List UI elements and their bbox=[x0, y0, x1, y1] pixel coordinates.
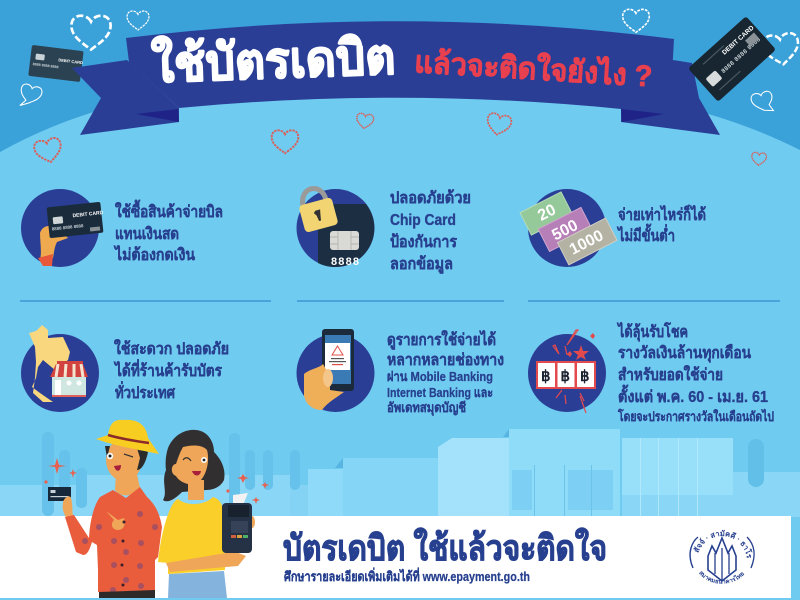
man: held card bbox=[48, 487, 71, 501]
man: shirt bbox=[65, 487, 162, 594]
item 4 text bbox=[113, 339, 229, 402]
item 4: Thailand map and shop icon bbox=[21, 325, 99, 412]
item 2: padlock and chip icon bbox=[296, 189, 374, 268]
item 4 text: ได้ที่ร้านค้ารับบัตร bbox=[113, 359, 222, 380]
item 1 text: ใช้ซื้อสินค้าจ่ายบิล bbox=[115, 199, 223, 221]
item 5 text: ผ่าน Mobile Banking bbox=[387, 369, 493, 384]
man: trousers bbox=[99, 590, 155, 598]
bank association emblem: สมาคมธนาคารไทย bbox=[699, 571, 744, 584]
item 1 text: แทนเงินสด bbox=[115, 225, 179, 243]
title: red part: แล้วจะติดใจยังไง ? bbox=[414, 44, 653, 94]
item 1: card in hand icon: 8888 8888 8888 bbox=[52, 223, 84, 231]
item 6: slot machine icon: ฿ bbox=[541, 368, 551, 385]
item 1 text bbox=[113, 199, 223, 264]
item 3: banknotes icon: 500 bbox=[549, 217, 581, 244]
man: hat bbox=[96, 420, 159, 454]
item 4 text: ใช้สะดวก ปลอดภัย bbox=[114, 339, 229, 358]
red dashed hearts bbox=[33, 112, 767, 166]
woman: jeans bbox=[168, 571, 227, 598]
item 6 text: สำหรับยอดใช้จ่าย bbox=[618, 365, 723, 384]
man: hair bbox=[105, 446, 148, 470]
item 6 text bbox=[616, 321, 774, 424]
woman: yellow shirt bbox=[158, 497, 225, 574]
item 5 text: อัพเดทสมุดบัญชี bbox=[387, 400, 466, 416]
right debit card: 8888 8888 8888 bbox=[721, 37, 762, 75]
item 5: phone in hand icon bbox=[296, 329, 374, 412]
title ribbon bbox=[72, 21, 720, 135]
item 5 text bbox=[387, 330, 504, 416]
man with hat holding card bbox=[48, 420, 162, 598]
left debit card bbox=[28, 45, 84, 82]
item 3: banknotes icon: 1000 bbox=[567, 227, 606, 259]
item 2 text: ป้องกันการ bbox=[390, 233, 457, 251]
man: neck bbox=[115, 470, 140, 495]
title: white part: ใช้บัตรเดบิต bbox=[150, 28, 396, 93]
item 3 text bbox=[616, 203, 706, 245]
man: head bbox=[106, 439, 142, 481]
item 2 text: ปลอดภัยด้วย bbox=[390, 189, 471, 207]
man: eye and mouth bbox=[107, 453, 113, 459]
item 2 text: Chip Card bbox=[390, 212, 456, 229]
item 6 text: ได้ลุ้นรับโชค bbox=[616, 321, 688, 342]
right debit card bbox=[688, 16, 776, 102]
woman: neck bbox=[188, 480, 204, 500]
item 3 text: จ่ายเท่าไหร่ก็ได้ bbox=[618, 203, 706, 224]
footer white strip bbox=[0, 516, 791, 598]
item 2: padlock and chip icon: 8888 bbox=[331, 256, 359, 268]
right debit card: DEBIT CARD bbox=[721, 24, 756, 57]
woman: card terminal bbox=[222, 503, 252, 553]
item 5 text: ดูรายการใช้จ่ายได้ bbox=[387, 330, 496, 351]
item 5 text: Internet Banking และ bbox=[387, 385, 493, 400]
item 1 text: ไม่ต้องกดเงิน bbox=[113, 245, 195, 264]
bank association emblem bbox=[689, 530, 755, 584]
white dashed hearts bbox=[17, 9, 800, 115]
item 3: banknotes icon: 20 bbox=[535, 201, 559, 225]
woman: receipt paper bbox=[233, 493, 248, 505]
item 6 text: ตั้งแต่ พ.ค. 60 - เม.ย. 61 bbox=[618, 384, 768, 406]
item 2 text bbox=[390, 189, 471, 275]
woman with card terminal bbox=[158, 430, 255, 598]
footer website line: ศึกษารายละเอียดเพิ่มเติมได้ที่ www.epayment.go.th bbox=[284, 567, 530, 584]
man: pointing hand bbox=[106, 511, 125, 530]
woman: forearm bbox=[166, 552, 246, 572]
footer slogan: บัตรเดบิต ใช้แล้วจะติดใจ bbox=[283, 527, 607, 568]
man: raised hand bbox=[63, 496, 73, 517]
dividers bbox=[20, 300, 780, 302]
item 1: card in hand icon: DEBIT CARD bbox=[72, 210, 104, 219]
skyline of buildings and trees bbox=[0, 429, 800, 518]
bank association emblem: สัจจ์ · สามัคคี · ธาโร bbox=[693, 530, 753, 558]
woman: terminal-side hand bbox=[249, 516, 255, 528]
item 6: slot machine icon: ฿ bbox=[560, 368, 570, 385]
man: shirt buttons bbox=[120, 520, 126, 586]
item 4 text: ทั่วประเทศ bbox=[115, 381, 176, 402]
item 1: card in hand icon bbox=[21, 189, 106, 267]
left debit card: DEBIT CARD bbox=[58, 57, 83, 65]
sparkles bbox=[44, 458, 269, 504]
left debit card: 8888 8888 8888 bbox=[32, 62, 59, 69]
item 5 text: หลากหลายช่องทาง bbox=[387, 352, 504, 369]
woman: hair bbox=[163, 430, 225, 501]
item 6 text: รางวัลเงินล้านทุกเดือน bbox=[618, 344, 751, 363]
item 2 text: ลอกข้อมูล bbox=[390, 255, 453, 275]
item 6: slot machine icon: ฿ bbox=[580, 368, 590, 385]
man: shirt heart pattern bbox=[82, 511, 158, 593]
item 6: slot machine icon bbox=[528, 330, 606, 413]
woman: eye and mouth bbox=[201, 457, 207, 463]
item 3: banknotes icon bbox=[520, 189, 617, 267]
item 3 text: ไม่มีขั้นต่ำ bbox=[616, 223, 675, 245]
woman: face bbox=[172, 445, 208, 484]
